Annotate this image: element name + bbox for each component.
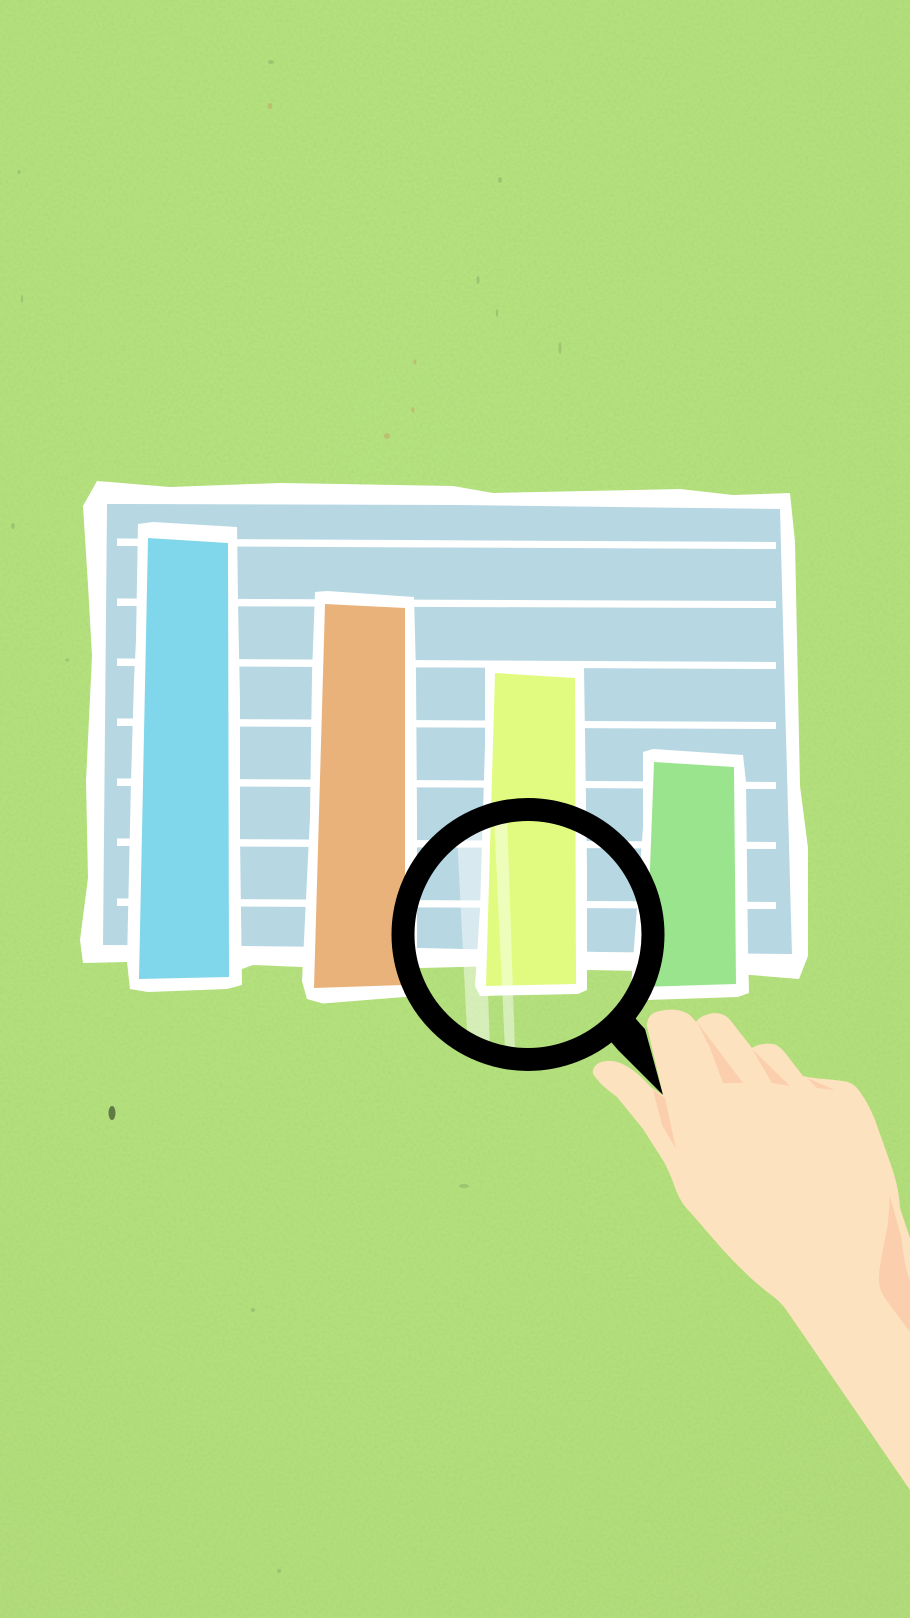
hand — [593, 1010, 910, 1490]
chart background panel — [103, 504, 792, 954]
gridlines — [117, 538, 776, 909]
lens light beam: right — [494, 815, 515, 1050]
lens rim highlight — [414, 820, 642, 1049]
bar chart — [80, 481, 808, 1050]
hand and arm silhouette — [593, 1010, 910, 1490]
finger shadows — [653, 1022, 835, 1149]
bar 3: yellow — [475, 667, 587, 996]
lens ring — [403, 810, 653, 1060]
chart paper: white backing sheet — [80, 481, 808, 979]
handle — [606, 1014, 663, 1095]
lens light beam: left — [458, 830, 490, 1042]
magnifying glass — [403, 810, 663, 1095]
wrist shadow — [879, 1196, 910, 1332]
bar 2: orange — [302, 591, 417, 1004]
bar 4: green — [630, 749, 749, 1000]
bar 1: blue — [127, 522, 242, 992]
